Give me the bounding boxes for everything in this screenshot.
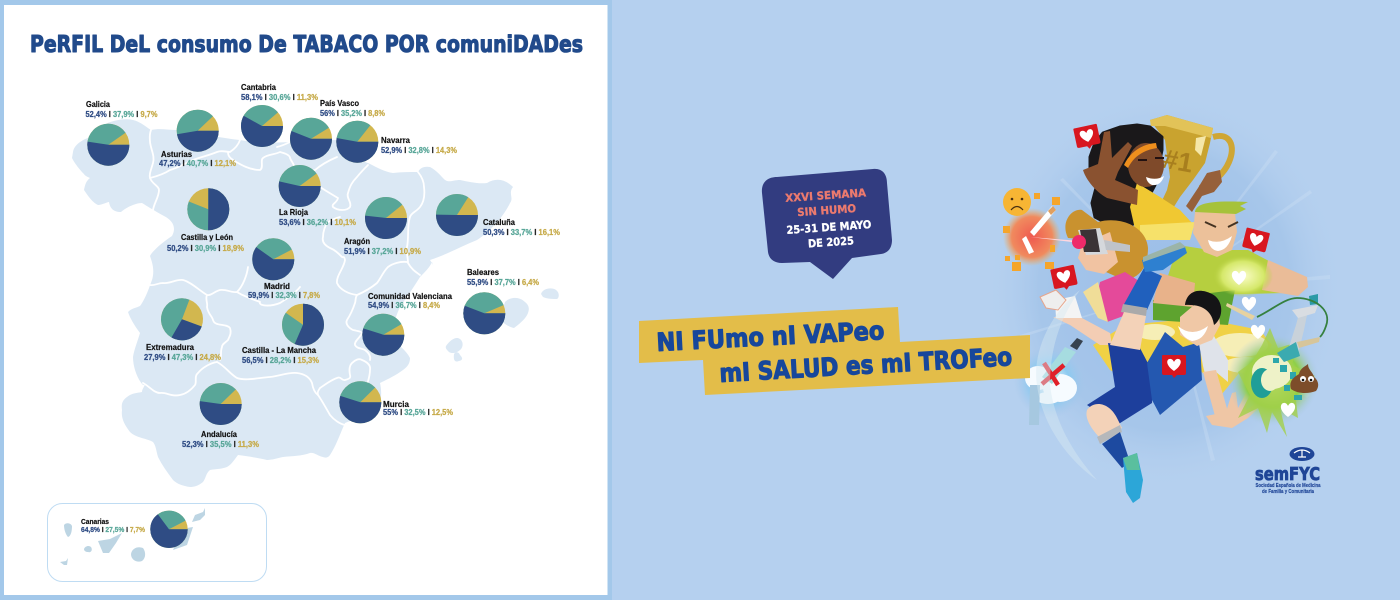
label: Castilla y León: 50,2% I 30,9% I 18,9% xyxy=(167,243,244,253)
pie: Asturias xyxy=(177,110,219,152)
shirt xyxy=(1130,183,1192,238)
label: Andalucía: Andalucía xyxy=(201,429,237,439)
hookah stem xyxy=(1288,310,1308,354)
label: País Vasco xyxy=(320,98,385,118)
arm with game controller xyxy=(1040,290,1112,345)
illustration: man with green hair xyxy=(1153,201,1308,325)
label: Madrid xyxy=(248,281,320,300)
label: Aragón: Aragón xyxy=(344,236,370,246)
illustration: boy in blue kicking xyxy=(1086,291,1262,503)
illustration: kicking leg xyxy=(1121,242,1187,316)
text: logo caption: de Familia y Comunitaria xyxy=(1262,489,1315,495)
callout: date speech bubble: XXVI SEMANA xyxy=(785,186,867,205)
label: Canarias: 64,8% I 27,5% I 7,7% xyxy=(81,525,145,534)
illustration: trophy xyxy=(1150,115,1232,212)
label: Baleares xyxy=(467,267,539,287)
pie: Aragón xyxy=(365,197,407,239)
panel: map of smoking profile xyxy=(4,5,608,595)
face xyxy=(1078,232,1118,274)
label: Asturias: 47,2% I 40,7% I 12,1% xyxy=(159,158,236,168)
label: Cantabria: Cantabria xyxy=(241,82,276,92)
illustration: background glow and rays xyxy=(985,90,1345,490)
pie: Cantabria xyxy=(241,105,283,147)
face xyxy=(1128,143,1164,187)
illustration: pixel explosion with cigarette xyxy=(1003,193,1080,271)
label: Andalucía xyxy=(182,429,259,449)
hair xyxy=(1090,125,1162,228)
icon: white hearts xyxy=(1242,297,1295,417)
icon: like badge top xyxy=(1073,124,1101,151)
label: Comunidad Valenciana: Comunidad Valenciana xyxy=(368,291,452,301)
pie: Castilla - La Mancha xyxy=(282,304,324,346)
illustration: woman with curly hair xyxy=(1083,125,1195,240)
label: Canarias xyxy=(81,517,145,534)
label: Extremadura: Extremadura xyxy=(146,342,194,352)
label: Navarra: 52,9% I 32,8% I 14,3% xyxy=(381,145,457,155)
label: Castilla - La Mancha: 56,5% I 28,2% I 15,3% xyxy=(242,355,319,365)
title: PeRFIL DeL consumo De TABACO POR comuniDADes xyxy=(30,32,583,58)
like on chest xyxy=(1162,355,1186,378)
text: logo wordmark: semFYC xyxy=(1255,464,1320,485)
label: Extremadura: 27,9% I 47,3% I 24,8% xyxy=(144,352,221,362)
label: Madrid: 59,9% I 32,3% I 7,8% xyxy=(248,290,320,300)
pie: Canarias xyxy=(150,511,188,548)
pie: Navarra xyxy=(336,121,378,163)
icon: poop emoji xyxy=(1290,364,1318,393)
illustration: broken vape with red cross xyxy=(1014,338,1086,425)
pie: Madrid xyxy=(252,238,294,280)
label: Cantabria xyxy=(241,82,318,102)
label: Aragón: 51,9% I 37,2% I 10,9% xyxy=(344,246,421,256)
pie: Baleares xyxy=(463,292,505,334)
illustration: green burst with hookah and poop xyxy=(1226,294,1327,437)
illustration: girl with VR headset xyxy=(1040,210,1153,345)
raised leg skin xyxy=(1110,312,1146,350)
label: Galicia: 52,4% I 37,9% I 9,7% xyxy=(86,109,158,119)
arm and peace hand xyxy=(1083,131,1138,205)
hair xyxy=(1185,291,1221,325)
label: Castilla y León xyxy=(167,232,244,253)
callout: date speech bubble xyxy=(762,169,892,279)
label: La Rioja: La Rioja xyxy=(279,207,308,217)
label: Comunidad Valenciana xyxy=(368,291,452,310)
pie: Galicia xyxy=(87,124,129,166)
text: logo caption xyxy=(1256,483,1321,495)
icon: like badge left xyxy=(1050,265,1078,292)
heart-hands glow xyxy=(1213,255,1273,297)
label: Cantabria: 58,1% I 30,6% I 11,3% xyxy=(241,92,318,102)
sleeve and arm xyxy=(1198,336,1228,382)
label: Navarra: Navarra xyxy=(381,135,410,145)
icon: logo emblem xyxy=(1290,447,1314,461)
label: La Rioja xyxy=(279,207,356,227)
panel: Canary Islands inset xyxy=(48,504,266,582)
shirt xyxy=(1096,272,1153,322)
shorts xyxy=(1087,343,1153,425)
pie: Castilla y León xyxy=(187,188,229,230)
slogan line 2: mI SALUD es mI TROFeo xyxy=(719,342,1013,388)
callout: date speech bubble: SIN HUMO xyxy=(797,202,857,219)
logo: semFYC xyxy=(1255,447,1321,495)
label: La Rioja: 53,6% I 36,2% I 10,1% xyxy=(279,217,356,227)
illustration: swoosh of kick xyxy=(1036,290,1097,480)
illustration: yellow burst xyxy=(1093,318,1272,394)
label: Asturias: Asturias xyxy=(161,149,192,159)
torso xyxy=(1147,332,1202,415)
illustration: cream smoke xyxy=(1135,324,1268,373)
arm xyxy=(1262,260,1308,296)
label: Galicia: Galicia xyxy=(86,99,110,109)
label: Galicia xyxy=(86,99,158,119)
hair xyxy=(1195,201,1248,214)
head xyxy=(1193,212,1237,257)
label: Cataluña: Cataluña xyxy=(483,217,515,227)
label: Murcia: 55% I 32,5% I 12,5% xyxy=(383,407,453,417)
label: Cataluña xyxy=(483,217,560,237)
label: Asturias xyxy=(159,149,236,168)
head xyxy=(1180,300,1220,346)
map: regional borders xyxy=(143,130,424,425)
label: Aragón xyxy=(344,236,421,256)
map: Balearic islands xyxy=(446,288,559,361)
hair xyxy=(1065,210,1148,280)
icon: sad emoji xyxy=(1003,188,1031,216)
label: Murcia: Murcia xyxy=(383,399,409,409)
text: logo caption: Sociedad Española de Medicina xyxy=(1256,483,1321,489)
pie: País Vasco xyxy=(290,118,332,160)
label: Castilla - La Mancha: Castilla - La Mancha xyxy=(242,345,316,355)
label: País Vasco: País Vasco xyxy=(320,98,359,108)
map: Spain xyxy=(72,119,559,487)
map: Canary Islands xyxy=(60,508,205,565)
VR headset xyxy=(1078,228,1108,255)
text: trophy number: #1 xyxy=(1161,144,1195,178)
hand xyxy=(1206,392,1262,428)
label: Cataluña: 50,3% I 33,7% I 16,1% xyxy=(483,227,560,237)
label: Extremadura xyxy=(144,342,221,362)
label: Murcia xyxy=(383,399,453,417)
label: Navarra xyxy=(381,135,457,155)
label: Castilla y León: Castilla y León xyxy=(181,232,233,242)
label: Comunidad Valenciana: 54,9% I 36,7% I 8,4% xyxy=(368,300,440,310)
label: Madrid: Madrid xyxy=(264,281,290,291)
pie: Extremadura xyxy=(155,292,209,346)
body xyxy=(1165,245,1290,295)
pie: Comunidad Valenciana xyxy=(362,314,404,356)
pie: Cataluña xyxy=(436,194,478,236)
label: Baleares: Baleares xyxy=(467,267,499,277)
pie: Murcia xyxy=(339,381,381,423)
panel: left frame xyxy=(0,0,612,600)
pie: La Rioja xyxy=(279,165,321,207)
boot xyxy=(1123,453,1143,503)
lower leg xyxy=(1086,404,1122,440)
label: Baleares: 55,9% I 37,7% I 6,4% xyxy=(467,277,539,287)
label: Andalucía: 52,3% I 35,5% I 11,3% xyxy=(182,439,259,449)
banner: slogan xyxy=(639,307,1030,395)
label: País Vasco: 56% I 35,2% I 8,8% xyxy=(320,108,385,118)
broken jar xyxy=(1251,368,1273,398)
slogan line 1: NI FUmo nI VAPeo xyxy=(656,316,885,357)
label: Castilla - La Mancha xyxy=(242,345,319,365)
label: Canarias: Canarias xyxy=(81,517,109,526)
icon: like badge right xyxy=(1241,227,1270,256)
pie: Andalucía xyxy=(200,383,242,425)
callout: date speech bubble: 25-31 DE MAYO xyxy=(786,218,872,237)
callout: date speech bubble: DE 2025 xyxy=(808,234,854,250)
